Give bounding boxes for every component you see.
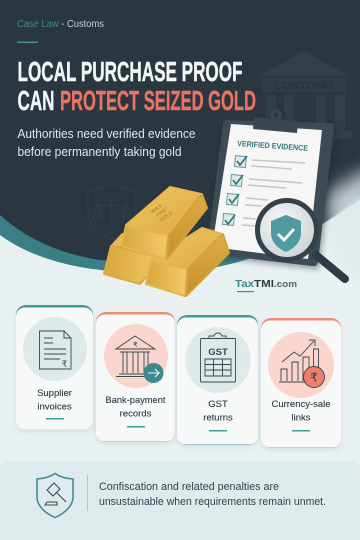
takeaway text: unsustainable when requirements remain unmet. (99, 496, 326, 508)
icon: shield gavel (37, 474, 73, 518)
subtitle: before permanently taking gold (18, 144, 182, 159)
icon: invoice (40, 331, 71, 369)
verified evidence heading: VERIFIED EVIDENCE (237, 139, 309, 153)
shield check (271, 215, 301, 252)
ghost customs building (259, 51, 352, 139)
label: Bank-payment (106, 395, 166, 406)
label: links (291, 412, 311, 424)
title: CAN (18, 85, 54, 116)
icon: rising chart (279, 340, 318, 382)
tag underline (17, 42, 38, 43)
label: Supplier (37, 388, 72, 399)
icon: GST clipboard (200, 333, 236, 382)
label: invoices (37, 402, 72, 412)
clipboard (207, 109, 334, 266)
card: supplier invoices (16, 305, 93, 430)
ghost scales shield (88, 183, 136, 240)
top bar (121, 187, 207, 259)
bottom-left bar (104, 233, 170, 284)
rupee glyph: ₹ (62, 360, 68, 370)
icon: rupee coin: ₹ (310, 370, 318, 384)
icon: bank (116, 336, 155, 376)
card: GST returns (177, 315, 258, 445)
subtitle (18, 126, 196, 159)
label: records (120, 408, 152, 420)
takeaway text: Confiscation and related penalties are (99, 481, 279, 493)
subtitle: Authorities need verified evidence (18, 126, 196, 141)
bottom-right bar (146, 228, 229, 296)
header curved background (0, 0, 360, 290)
rupee glyph: ₹ (133, 341, 138, 349)
label: GST (208, 399, 228, 410)
label: returns (203, 412, 233, 424)
label: Currency-sale (272, 399, 330, 410)
top bar: GOLD (159, 210, 174, 223)
card: currency-sale links (261, 318, 341, 448)
magnifying glass (258, 200, 345, 279)
clip (253, 109, 298, 133)
top bar: 999.9 (150, 203, 163, 216)
GST text: GST (208, 347, 228, 358)
icon: arrow badge (144, 363, 164, 383)
top bar: FINE (156, 207, 169, 219)
title (18, 56, 256, 116)
category tag: Case Law - Customs (17, 19, 104, 30)
bottom panel (0, 461, 360, 540)
card: bank-payment records (96, 312, 175, 442)
TaxTMI logo: TaxTMI.com (235, 278, 297, 290)
checklist (223, 156, 305, 226)
gold bars (104, 187, 229, 296)
paper (212, 124, 322, 259)
ghost customs building: CUSTOMS (274, 80, 334, 92)
